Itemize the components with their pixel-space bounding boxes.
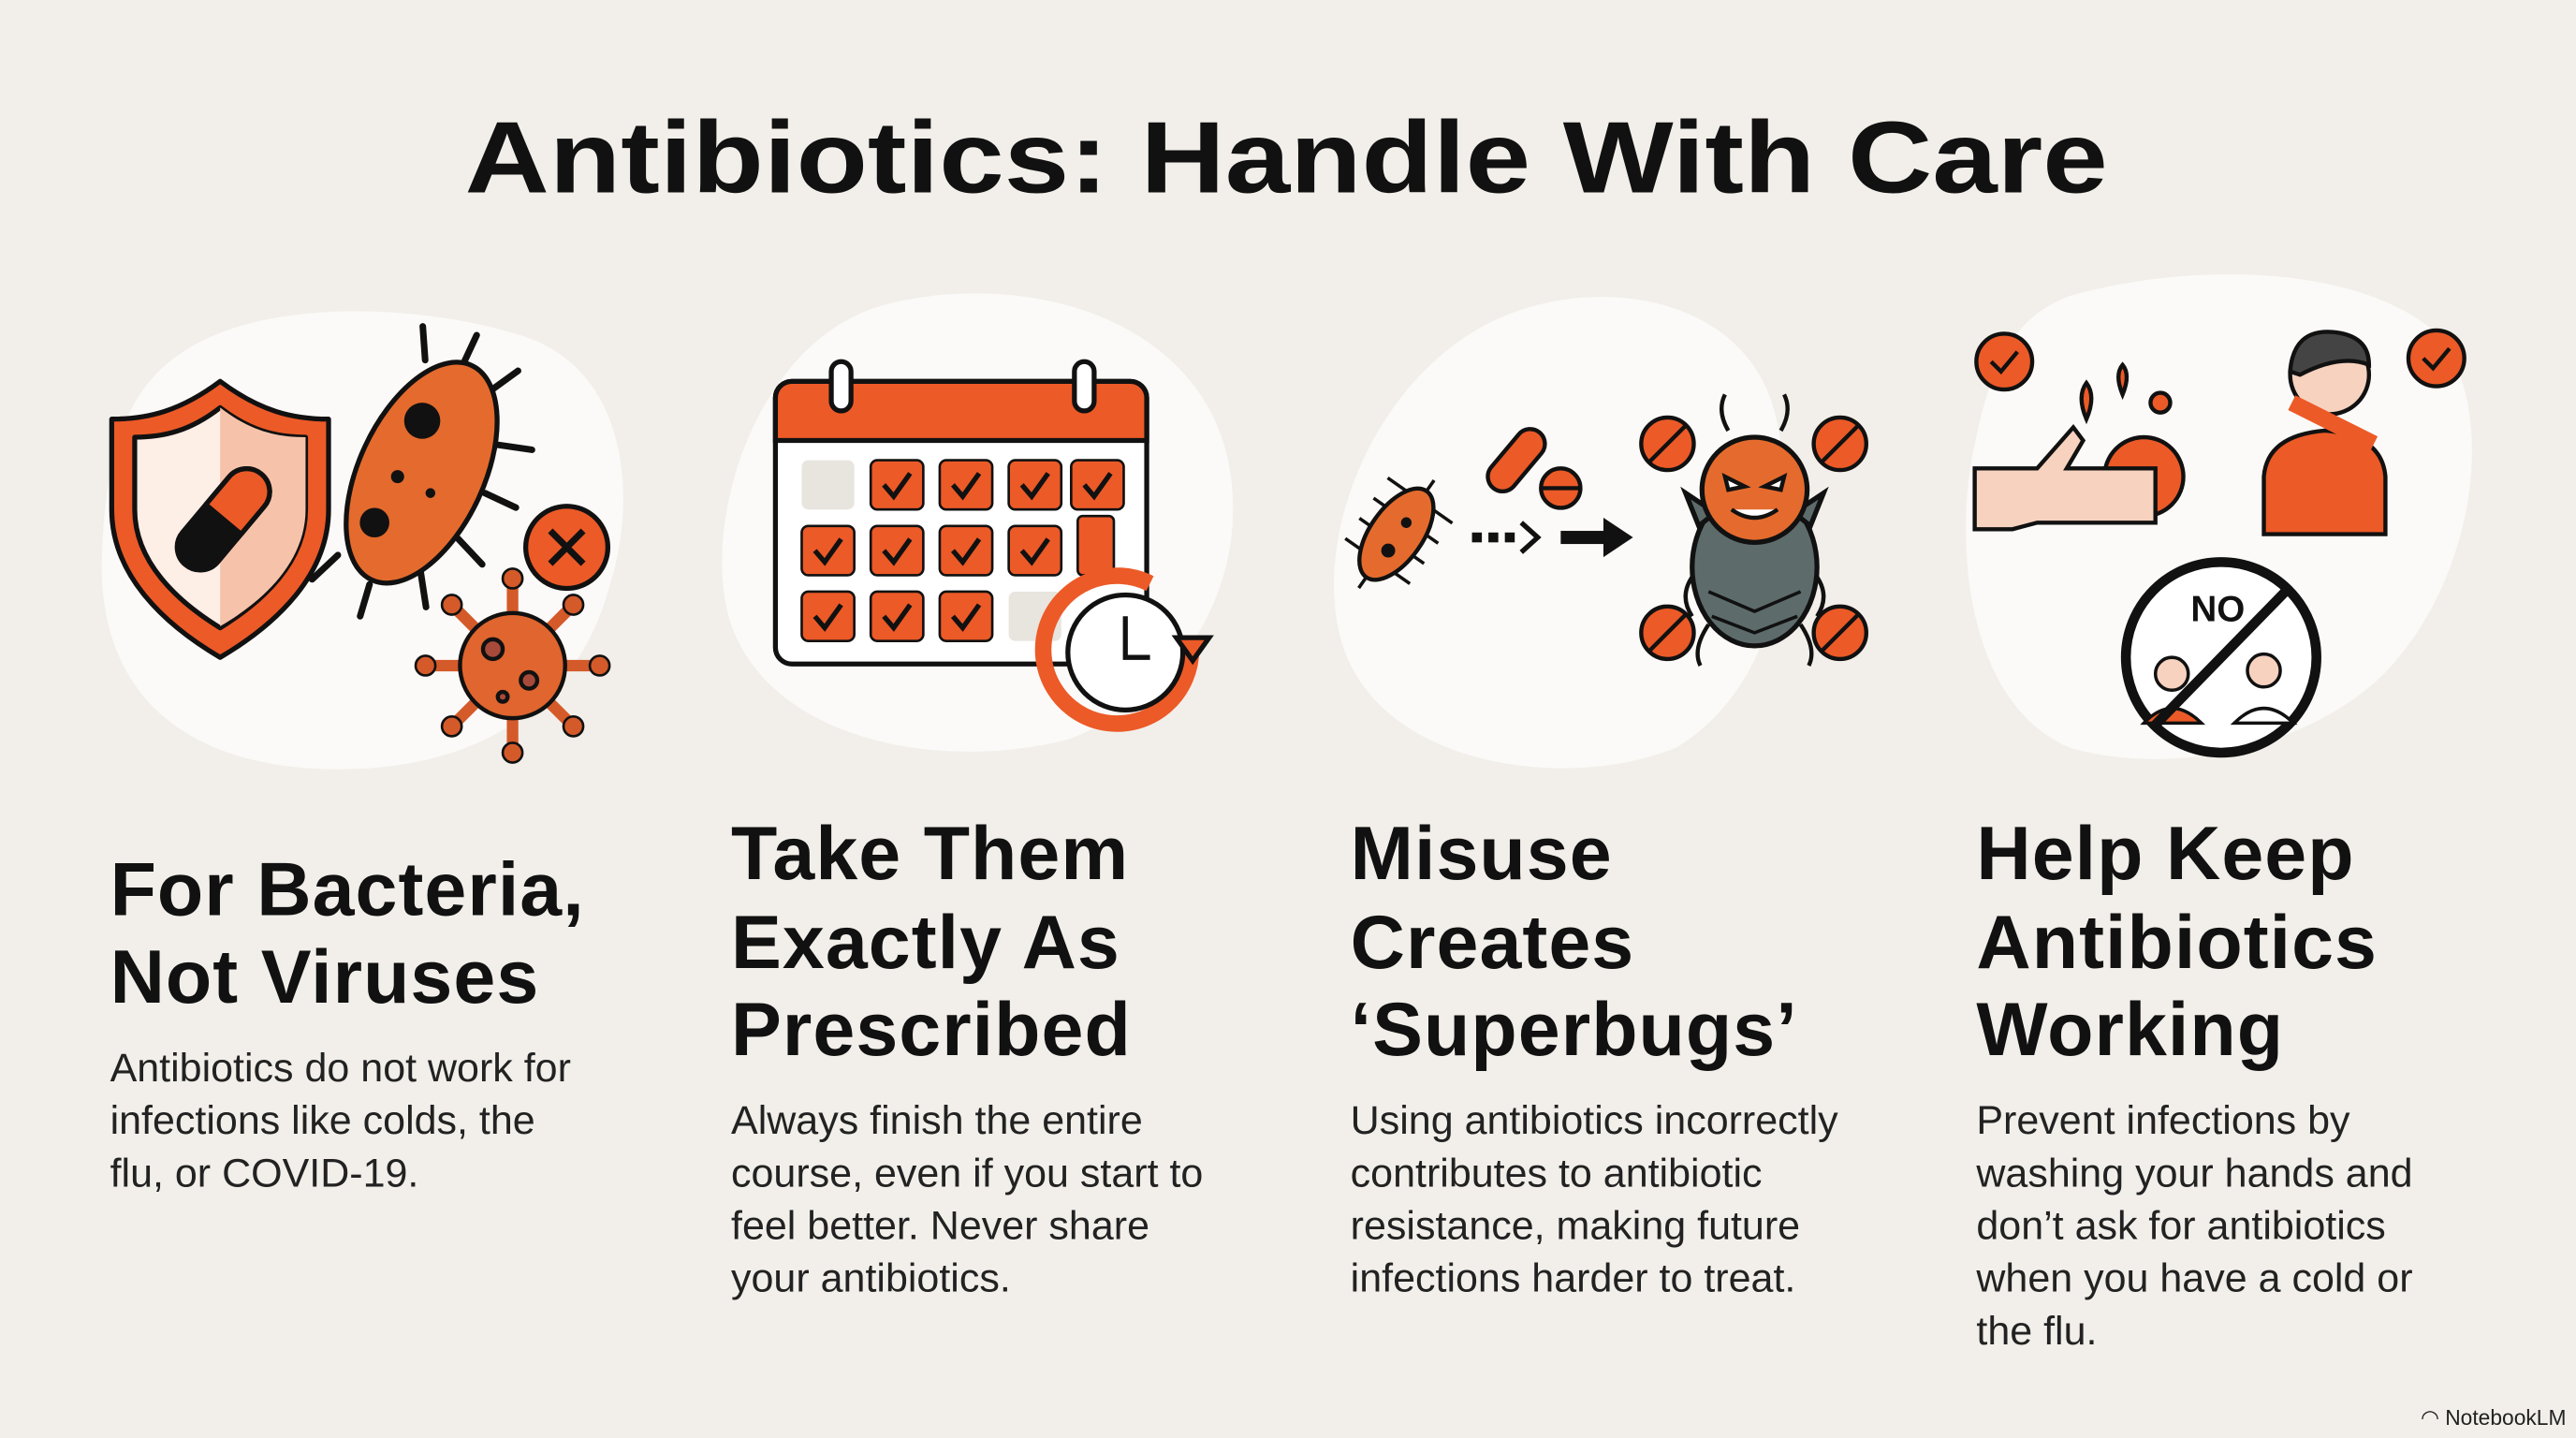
title: Antibiotics: Handle With Care (465, 100, 2108, 214)
body 3: Using antibiotics incorrectly (1351, 1098, 1838, 1143)
blob 3 (1334, 297, 1787, 769)
panel: bacteria not viruses (102, 311, 623, 1196)
panel: keep antibiotics working (1966, 274, 2472, 1354)
heading 1: Not Viruses (110, 935, 539, 1020)
body 1: infections like colds, the (110, 1098, 535, 1143)
body 3: infections harder to treat. (1351, 1256, 1795, 1301)
heading 2: Take Them (731, 812, 1129, 896)
heading 4: Help Keep (1976, 812, 2355, 896)
heading 3: Misuse (1351, 812, 1613, 896)
body 2: feel better. Never share (731, 1203, 1149, 1248)
body 4: don’t ask for antibiotics (1976, 1203, 2386, 1248)
icon: bacterium (300, 313, 575, 656)
body 1: Antibiotics do not work for (110, 1046, 571, 1091)
blob 2 (722, 293, 1233, 752)
panel: superbugs (1326, 297, 1866, 1301)
watermark: ◠ NotebookLM (2421, 1405, 2566, 1430)
arrow: transformation (1472, 518, 1633, 557)
body 2: course, even if you start to (731, 1151, 1203, 1196)
body 4: when you have a cold or (1975, 1256, 2413, 1301)
icon: washing hands (1975, 365, 2184, 529)
blob 4 (1966, 274, 2472, 759)
body 2: Always finish the entire (731, 1098, 1143, 1143)
body 1: flu, or COVID-19. (110, 1151, 418, 1196)
heading 2: Exactly As (731, 901, 1120, 985)
blob 1 (102, 311, 623, 770)
heading 3: Creates (1351, 901, 1634, 985)
panel: take as prescribed (722, 293, 1233, 1301)
icon: clock (1043, 576, 1209, 724)
body 3: contributes to antibiotic (1351, 1151, 1763, 1196)
icon: sneezing person (2264, 331, 2385, 535)
icon: x circle (526, 506, 607, 588)
icon: check circles (1976, 330, 2465, 389)
icon: no antibiotics request (2126, 562, 2317, 753)
body 4: Prevent infections by (1976, 1098, 2350, 1143)
heading 2: Prescribed (731, 988, 1132, 1072)
icon: shield with pill (111, 381, 329, 657)
heading 4: Working (1976, 988, 2284, 1072)
icon: pills (1482, 423, 1580, 507)
icon: superbug (1641, 394, 1866, 666)
icon: no antibiotics request: NO (2190, 590, 2245, 630)
body 3: resistance, making future (1351, 1203, 1800, 1248)
body 4: the flu. (1976, 1309, 2097, 1354)
body 4: washing your hands and (1975, 1151, 2413, 1196)
icon: small bacterium (1326, 458, 1467, 610)
body 2: your antibiotics. (731, 1256, 1011, 1301)
icon: virus (416, 568, 609, 763)
heading 4: Antibiotics (1976, 901, 2378, 985)
heading 3: ‘Superbugs’ (1351, 988, 1798, 1072)
icon: calendar (775, 361, 1147, 664)
heading 1: For Bacteria, (110, 848, 585, 932)
